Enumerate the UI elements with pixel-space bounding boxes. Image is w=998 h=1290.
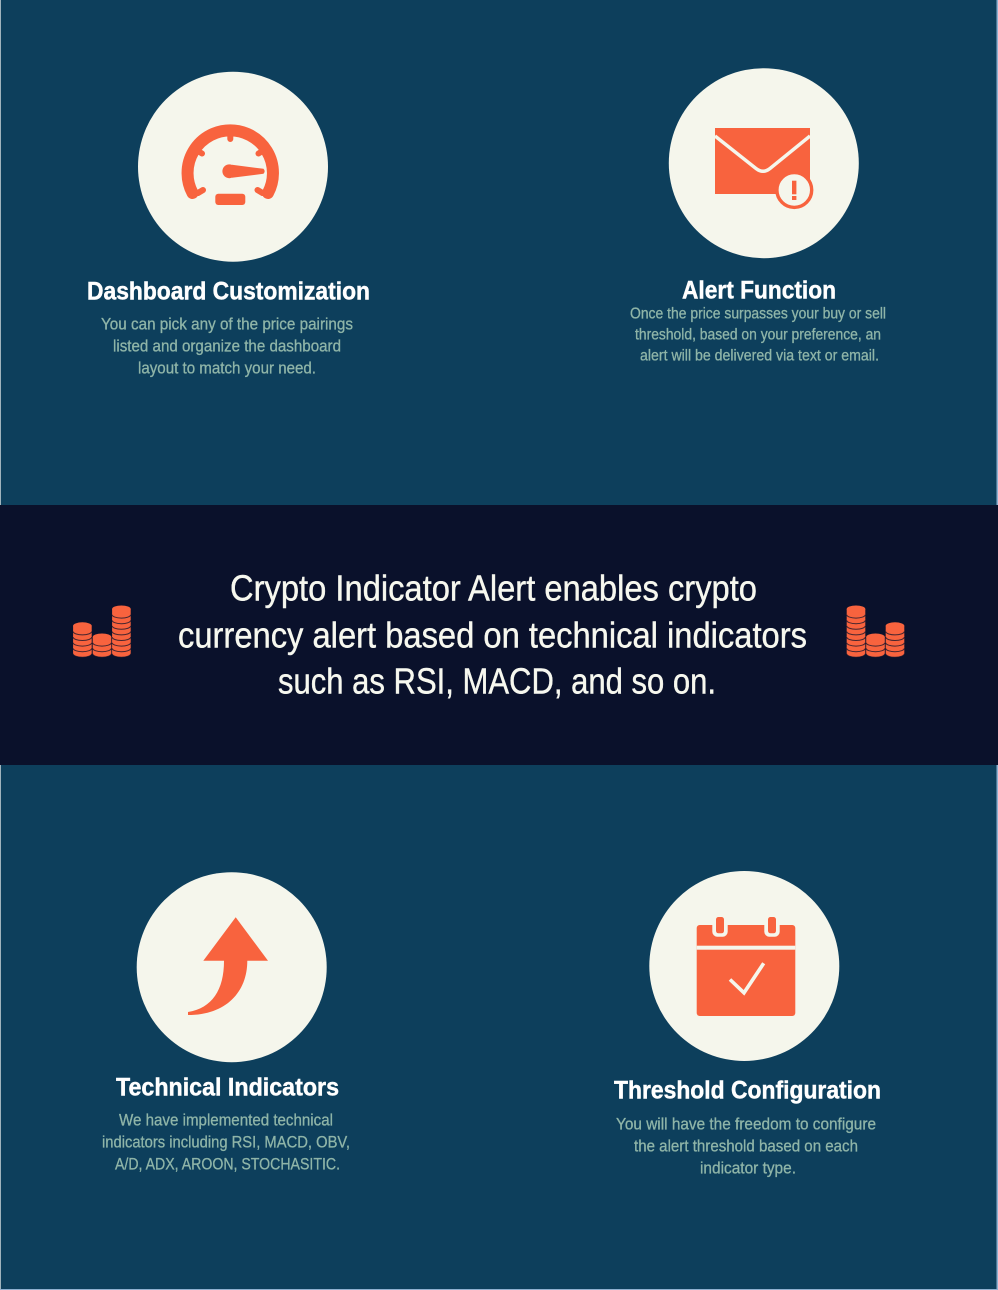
statement text: currency alert based on technical indicators xyxy=(178,614,807,655)
text: dashboard customization description: layout to match your need. xyxy=(138,358,316,377)
text: alert function description xyxy=(630,305,886,364)
heading: alert function: Alert Function xyxy=(682,276,836,304)
icon: envelope with alert xyxy=(669,68,859,258)
heading: technical indicators: Technical Indicators xyxy=(116,1073,339,1101)
text: alert function description: threshold, based on your preference, an xyxy=(635,326,881,343)
text: threshold configuration description: You will have the freedom to configure xyxy=(616,1114,876,1133)
heading: dashboard customization: Dashboard Customization xyxy=(87,277,370,305)
text: dashboard customization description: You can pick any of the price pairings xyxy=(101,314,353,333)
statement text xyxy=(178,567,807,701)
text: technical indicators description xyxy=(102,1110,350,1173)
icon: calendar with check xyxy=(649,871,839,1061)
panel: dashboard customization xyxy=(87,72,370,377)
icon: coin stacks left xyxy=(73,606,131,657)
text: technical indicators description: indicators including RSI, MACD, OBV, xyxy=(102,1132,350,1151)
text: dashboard customization description xyxy=(101,314,353,377)
text: threshold configuration description xyxy=(616,1114,876,1177)
icon: coin stacks right xyxy=(847,606,904,657)
text: dashboard customization description: listed and organize the dashboard xyxy=(113,336,341,355)
text: technical indicators description: We have implemented technical xyxy=(119,1110,333,1129)
statement text: such as RSI, MACD, and so on. xyxy=(278,660,716,701)
panel: central statement band xyxy=(0,505,998,765)
text: alert function description: alert will be delivered via text or email. xyxy=(640,347,879,364)
text: alert function description: Once the price surpasses your buy or sell xyxy=(630,305,886,322)
text: threshold configuration description: the alert threshold based on each xyxy=(634,1136,858,1155)
statement text: Crypto Indicator Alert enables crypto xyxy=(230,567,757,608)
panel: alert function xyxy=(630,68,886,364)
heading: threshold configuration: Threshold Configuration xyxy=(614,1076,881,1104)
icon: curved up arrow xyxy=(137,872,327,1062)
panel: threshold configuration xyxy=(614,871,881,1177)
panel: technical indicators xyxy=(102,872,350,1173)
text: threshold configuration description: indicator type. xyxy=(700,1158,796,1177)
icon: speedometer xyxy=(138,72,328,262)
text: technical indicators description: A/D, ADX, AROON, STOCHASITIC. xyxy=(115,1154,340,1173)
